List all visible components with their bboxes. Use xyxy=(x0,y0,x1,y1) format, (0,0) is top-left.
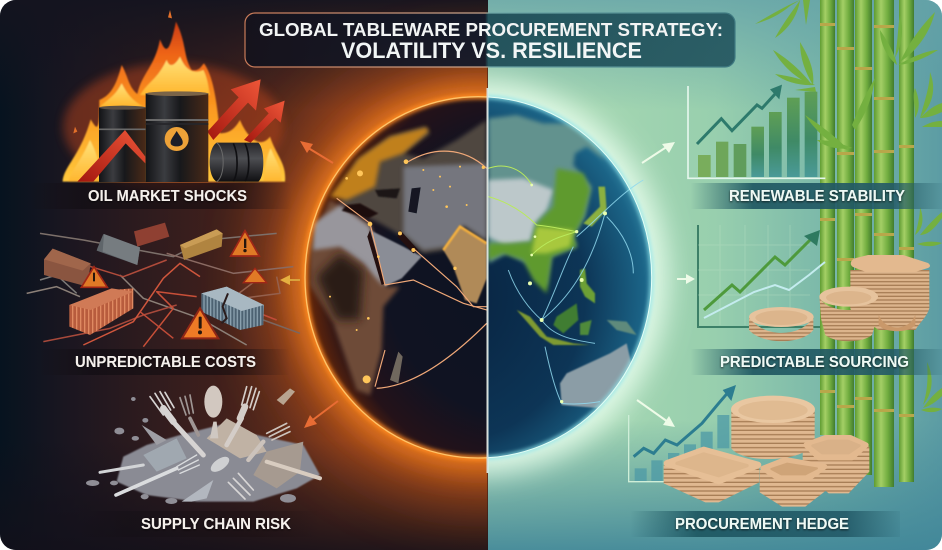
low plate stack xyxy=(749,307,814,341)
fork bottom xyxy=(228,473,253,499)
label band: predictable sourcing xyxy=(690,349,942,375)
small square stack xyxy=(760,460,828,507)
land New Guinea xyxy=(607,320,637,335)
land Arabia xyxy=(370,230,422,287)
fork upper left xyxy=(150,392,203,455)
green routes xyxy=(488,166,577,255)
square stack right xyxy=(803,438,869,493)
short barrel xyxy=(99,107,146,182)
fork right xyxy=(248,423,290,460)
shipping routes, left xyxy=(337,151,487,388)
land Sumatra xyxy=(517,310,590,345)
warning triangle right small xyxy=(243,268,267,283)
illustration: small plate stack and stacked bowls xyxy=(749,270,929,341)
oil drop badge xyxy=(165,127,189,151)
lights, right xyxy=(528,184,607,403)
land Africa xyxy=(310,200,400,395)
warning triangle large xyxy=(182,308,218,338)
leaves xyxy=(755,0,942,412)
chart: procurement hedge with arrow xyxy=(629,385,736,482)
bowl stack xyxy=(819,287,878,341)
fork lower xyxy=(116,455,199,495)
red arrow small xyxy=(244,101,285,143)
zigzag arrow xyxy=(77,130,145,182)
label band: oil market shocks xyxy=(30,183,292,209)
trend arrow xyxy=(697,90,779,144)
light blue line xyxy=(704,262,825,318)
red arrow large xyxy=(207,79,261,140)
label: renewable stability: RENEWABLE STABILITY xyxy=(729,188,905,205)
land Borneo xyxy=(553,303,578,333)
sea routes, right xyxy=(508,180,643,404)
label: predictable sourcing: PREDICTABLE SOURCING xyxy=(720,354,909,371)
seas xyxy=(342,203,378,218)
long handle xyxy=(267,462,320,478)
title line two: VOLATILITY VS. RESILIENCE xyxy=(341,38,642,63)
orange rim xyxy=(301,92,486,462)
illustration: broken plastic cutlery pile xyxy=(86,386,320,504)
bars xyxy=(698,92,817,177)
left hemisphere xyxy=(301,92,487,462)
central divider line xyxy=(486,88,488,473)
land Asia xyxy=(488,115,605,287)
fork rear xyxy=(180,395,198,435)
tall plate stack xyxy=(731,396,815,459)
land India xyxy=(443,227,487,303)
label: procurement hedge: PROCUREMENT HEDGE xyxy=(675,516,849,533)
fragments xyxy=(86,397,296,504)
label band: supply chain risk xyxy=(80,511,320,537)
upper part of square stack xyxy=(851,255,930,272)
right hemisphere xyxy=(488,93,656,462)
land Japan xyxy=(583,187,607,227)
tall barrel xyxy=(146,93,208,182)
container red rear xyxy=(134,223,169,247)
label band: renewable stability xyxy=(690,183,942,209)
arrows: right side pointing outward xyxy=(637,142,695,427)
lying barrel xyxy=(210,143,263,182)
Madagascar xyxy=(390,352,403,383)
bamboo leaves over the chart xyxy=(805,115,852,150)
container grey xyxy=(97,234,140,265)
land Australia xyxy=(560,343,632,408)
background: left volatility side xyxy=(0,0,488,550)
flame glow xyxy=(63,63,283,190)
pale halo xyxy=(488,68,684,492)
axes xyxy=(688,86,825,178)
warning triangle upper right xyxy=(231,231,259,256)
city lights, left xyxy=(329,159,485,383)
land Philippines xyxy=(580,268,595,303)
square stack rear xyxy=(850,270,929,331)
large tray xyxy=(664,450,759,502)
container rust left xyxy=(44,249,91,287)
title line one: GLOBAL TABLEWARE PROCUREMENT STRATEGY: xyxy=(259,20,723,40)
flames xyxy=(63,22,285,182)
container yellow xyxy=(180,229,223,260)
label band: unpredictable costs xyxy=(40,349,290,375)
illustration: bagasse plates and trays xyxy=(664,396,869,507)
illustration: burning oil barrels with rising arrows xyxy=(63,10,285,190)
illustration: broken shipping network with containers xyxy=(27,223,300,347)
arrows: left side pointing outward xyxy=(280,141,338,428)
fork upper right xyxy=(227,387,259,445)
container blue cracked xyxy=(201,287,264,330)
globe with orange and green halves xyxy=(263,56,693,500)
label: oil market shocks: OIL MARKET SHOCKS xyxy=(88,188,247,205)
label: unpredictable costs: UNPREDICTABLE COSTS xyxy=(75,354,256,371)
title panel xyxy=(245,13,735,67)
land Eurasia xyxy=(340,120,487,253)
warning triangle left xyxy=(81,267,107,287)
green arrow xyxy=(704,238,812,310)
spoon xyxy=(204,386,222,438)
nodes xyxy=(820,23,914,417)
label band: procurement hedge xyxy=(630,511,900,537)
background: right resilience side xyxy=(488,0,942,550)
label: supply chain risk: SUPPLY CHAIN RISK xyxy=(141,516,291,533)
container orange xyxy=(69,288,133,335)
network cracks xyxy=(27,233,300,347)
green land China and SE Asia xyxy=(488,168,590,293)
chart: renewable stability bars and trend arrow xyxy=(688,85,825,178)
illustration: bamboo grove xyxy=(755,0,942,487)
chart: predictable sourcing line chart xyxy=(698,225,825,327)
blue rim xyxy=(488,93,656,462)
shard pile xyxy=(117,425,320,502)
orange halo xyxy=(228,68,487,536)
stalks xyxy=(820,0,835,435)
